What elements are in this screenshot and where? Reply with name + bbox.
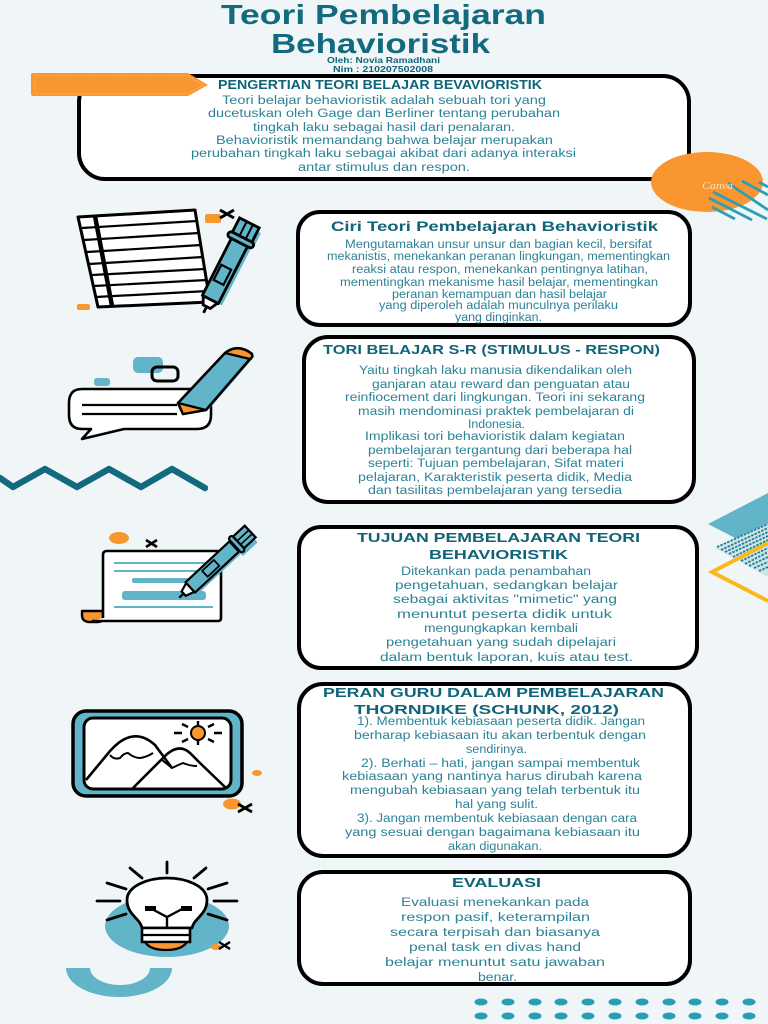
panel: tori belajar S-R (304, 337, 694, 502)
heading ribbon (31, 73, 208, 96)
body text (327, 239, 670, 324)
decoration: orange circle with stripes (651, 152, 768, 220)
decoration: triangles and wave pattern (708, 493, 768, 601)
heading: Ciri Teori Pembelajaran Behavioristik (331, 219, 659, 234)
panel: pengertian (31, 73, 689, 179)
body text: Implikasi tori behavioristik dalam kegiatan (365, 431, 625, 443)
body text: masih mendominasi praktek pembelajaran di (358, 406, 634, 418)
heading: TUJUAN PEMBELAJARAN TEORI (357, 531, 640, 545)
body text: perubahan tingkah laku sebagai akibat dari adanya interaksi (191, 148, 576, 160)
body text (345, 365, 645, 497)
body text: mengungkapkan kembali (424, 623, 578, 635)
body text: hal yang sulit. (455, 799, 538, 811)
body text: 3). Jangan membentuk kebiasaan dengan cara (357, 813, 638, 825)
body text: mengubah kebiasaan yang telah terbentuk itu (350, 785, 640, 797)
heading: PERAN GURU DALAM PEMBELAJARAN (323, 686, 664, 700)
decoration: dot grid (474, 998, 756, 1020)
body text: dan tasilitas pembelajaran yang tersedia (368, 485, 623, 497)
body text: mekanistis, menekankan peranan lingkungan, mementingkan (327, 251, 670, 263)
body text: menuntut peserta didik untuk (397, 609, 612, 621)
body text (191, 95, 576, 174)
panel: ciri teori (298, 212, 690, 325)
body text: sendirinya. (466, 744, 527, 756)
body text: reinfiocement dari lingkungan. Teori ini sekarang (345, 392, 645, 404)
decoration: orange circle with stripes: Canva (702, 180, 734, 192)
body text: peranan kemampuan dan hasil belajar (392, 289, 607, 301)
body text: 1). Membentuk kebiasaan peserta didik. Jangan (357, 716, 645, 728)
body text: Mengutamakan unsur unsur dan bagian kecil, bersifat (345, 239, 653, 251)
body text: pembelajaran tergantung dari beberapa hal (368, 445, 632, 457)
heading (323, 686, 664, 717)
body text: pelajaran, Karakteristik peserta didik, Media (358, 472, 633, 484)
body text (385, 897, 605, 984)
body text: ganjaran atau reward dan penguatan atau (372, 379, 630, 391)
author credit (327, 55, 440, 74)
body text: dalam bentuk laporan, kuis atau test. (380, 652, 633, 664)
icon: light bulb (66, 862, 237, 997)
body text: Yaitu tingkah laku manusia dikendalikan oleh (359, 365, 632, 377)
author credit: Oleh: Novia Ramadhani (327, 55, 440, 65)
body text: 2). Berhati – hati, jangan sampai membentuk (361, 758, 640, 770)
body text: tingkah laku sebagai hasil dari penalaran. (253, 122, 515, 134)
body text: seperti: Tujuan pembelajaran, Sifat materi (368, 458, 624, 470)
body text: benar. (478, 972, 517, 984)
author credit: Nim : 210207502008 (333, 64, 433, 74)
body text: Behavioristik memandang bahwa belajar merupakan (216, 135, 553, 147)
body text: yang diperoleh adalah munculnya perilaku (379, 300, 618, 312)
body text: akan digunakan. (448, 841, 542, 853)
body text: mementingkan mekanisme hasil belajar, mementingkan (340, 277, 658, 289)
body text: ducetuskan oleh Gage dan Berliner tentang perubahan (208, 108, 560, 120)
icon: notebook and pen (77, 210, 263, 320)
heading: BEHAVIORISTIK (429, 548, 568, 562)
decoration: zigzag (0, 469, 205, 488)
heading: THORNDIKE (SCHUNK, 2012) (354, 703, 619, 717)
pen (191, 217, 263, 320)
body text: belajar menuntut satu jawaban (385, 957, 605, 969)
body text (380, 566, 633, 664)
body text: yang dinginkan. (455, 312, 542, 324)
body text: penal task en divas hand (409, 942, 581, 954)
pen (172, 524, 259, 607)
body text: pengetahuan yang sudah dipelajari (386, 637, 616, 649)
heading: TORI BELAJAR S-R (STIMULUS - RESPON) (323, 343, 660, 357)
body text: berharap kebiasaan itu akan terbentuk dengan (354, 730, 646, 742)
body text: Ditekankan pada penambahan (401, 566, 591, 578)
body text: secara terpisah dan biasanya (390, 927, 601, 939)
body text: Evaluasi menekankan pada (401, 897, 590, 909)
panel: tujuan pembelajaran (299, 527, 697, 668)
heading: EVALUASI (452, 876, 541, 890)
body text: Teori belajar behavioristik adalah sebuah tori yang (222, 95, 546, 107)
body text (342, 716, 646, 853)
body text: Indonesia. (468, 419, 525, 431)
icon: framed landscape (73, 711, 262, 812)
body text: yang sesuai dengan bagaimana kebiasaan itu (345, 827, 640, 839)
body text: respon pasif, keterampilan (401, 912, 590, 924)
title: Behavioristik (271, 28, 491, 59)
body text: sebagai aktivitas "mimetic" yang (393, 594, 617, 606)
panel: peran guru (299, 684, 690, 856)
body text: kebiasaan yang nantinya harus dirubah karena (342, 771, 643, 783)
panel: evaluasi (299, 872, 690, 984)
body text: antar stimulus dan respon. (298, 162, 470, 174)
body text: pengetahuan, sedangkan belajar (395, 580, 618, 592)
icon: document and pen (82, 524, 259, 622)
body text: reaksi atau respon, menekankan pentingnya latihan, (352, 264, 648, 276)
heading (357, 531, 640, 562)
title (221, 0, 546, 59)
icon: speech bubble and pencil (69, 348, 255, 439)
heading: PENGERTIAN TEORI BELAJAR BEVAVIORISTIK (218, 78, 542, 92)
